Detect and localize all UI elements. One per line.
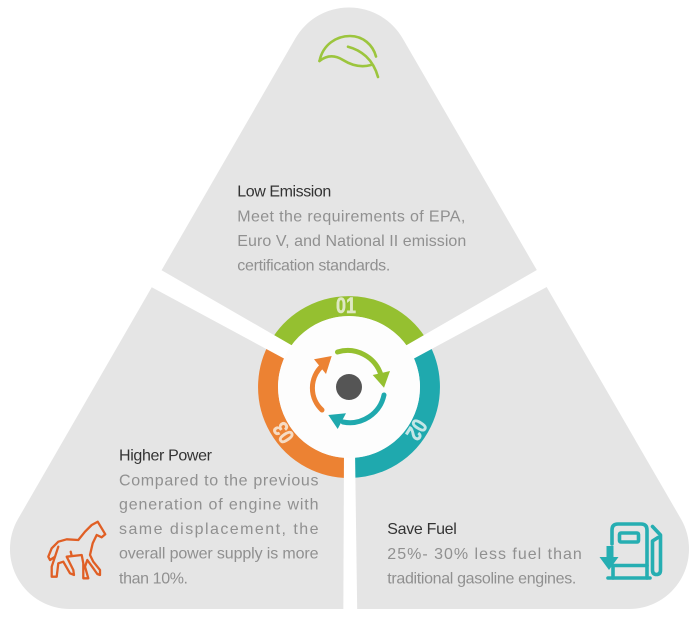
- text block: higher power: same displacement, the: [119, 521, 319, 538]
- text block: low emission: [237, 184, 466, 275]
- heading: Higher Power: [119, 448, 213, 464]
- ring segment 02: [349, 346, 430, 468]
- icon: horse: [48, 522, 105, 578]
- body: 25%- 30% less fuel than: [387, 546, 582, 563]
- centre dot: [336, 374, 362, 400]
- text block: save fuel: [387, 521, 582, 587]
- download arrow: [600, 546, 618, 570]
- teal arrow: [328, 395, 384, 429]
- centre ring: [268, 306, 430, 468]
- text block: save fuel: traditional gasoline engines.: [387, 570, 576, 587]
- text block: higher power: [119, 448, 319, 587]
- cycle arrows: [312, 351, 390, 429]
- heading: Save Fuel: [387, 521, 457, 538]
- green arrow: [338, 351, 390, 388]
- icon: fuel pump: [600, 524, 660, 578]
- text block: higher power: generation of engine with: [119, 496, 318, 513]
- orange arrow: [312, 356, 332, 410]
- panel dividers: [136, 261, 562, 618]
- ring segment 01: [279, 306, 419, 346]
- text block: higher power: overall power supply is more: [119, 546, 319, 563]
- text block: low emission: Euro V, and National II emission: [237, 233, 466, 250]
- body: Compared to the previous: [119, 472, 318, 489]
- icon: leaf: [320, 36, 378, 77]
- text block: higher power: than 10%.: [119, 570, 188, 587]
- text block: low emission: certification standards.: [237, 258, 390, 275]
- number 02: 02: [401, 415, 432, 445]
- heading: Low Emission: [237, 184, 331, 200]
- centre white disc: [278, 316, 420, 458]
- body: Meet the requirements of EPA,: [237, 208, 465, 226]
- ring segment 03: [268, 346, 349, 468]
- number 03: 03: [267, 417, 299, 448]
- number 01: 01: [336, 293, 356, 318]
